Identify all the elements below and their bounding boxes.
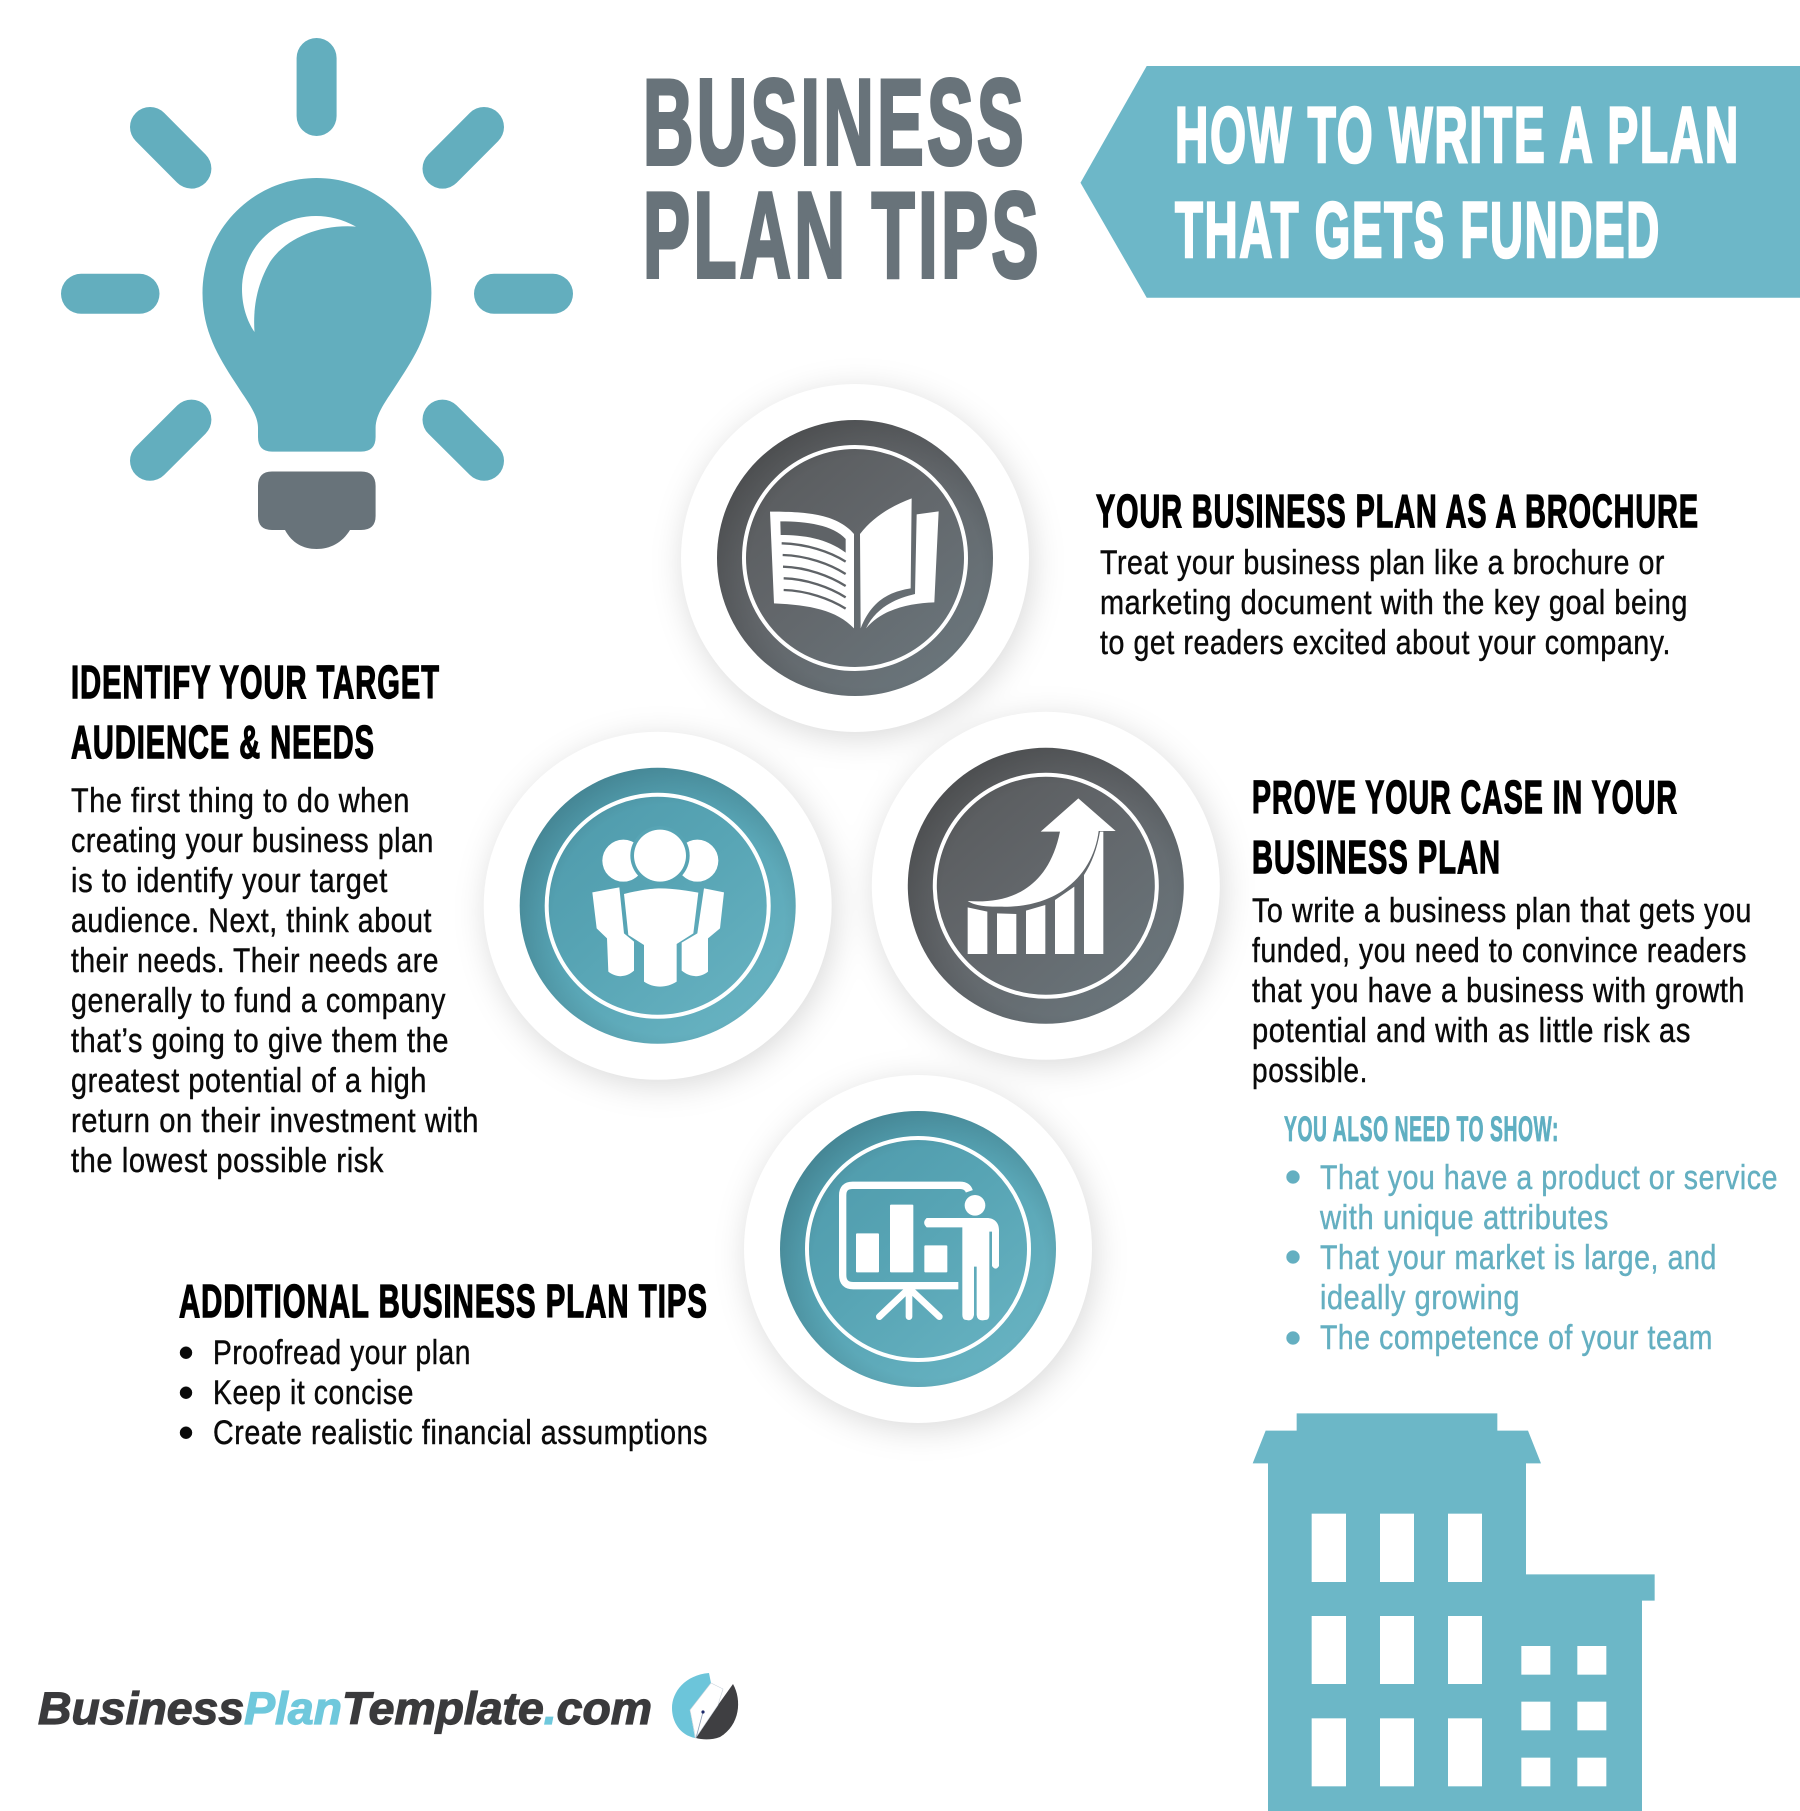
icon: presenter at board: [843, 1185, 999, 1320]
icon: light bulb: [81, 58, 553, 549]
banner: [1080, 66, 1800, 298]
body text: [71, 782, 479, 1180]
body text: marketing document with the key goal being: [1100, 584, 1688, 622]
bullet list: That your market is large, and: [1320, 1239, 1717, 1277]
bullet list: with unique attributes: [1319, 1199, 1609, 1237]
body text: the lowest possible risk: [71, 1142, 384, 1180]
circle: people: [484, 732, 832, 1080]
icon: rising bars and arrow: [968, 798, 1116, 954]
body text: The first thing to do when: [71, 782, 410, 820]
body text: creating your business plan: [71, 822, 434, 860]
body text: [1100, 544, 1688, 662]
body text: their needs. Their needs are: [71, 942, 439, 980]
title: BUSINESS: [643, 54, 1027, 190]
panel: prove your case: [1252, 771, 1778, 1357]
panel: brochure: [1096, 485, 1699, 662]
logo: [38, 1673, 738, 1739]
panel: additional tips: [179, 1275, 708, 1452]
bulb glass: [202, 178, 431, 452]
body text: Treat your business plan like a brochure or: [1100, 544, 1665, 582]
body text: potential and with as little risk as: [1252, 1012, 1691, 1050]
bullet list: Create realistic financial assumptions: [213, 1414, 708, 1452]
title: PLAN TIPS: [643, 167, 1042, 303]
heading: AUDIENCE & NEEDS: [71, 716, 375, 768]
building: [1253, 1413, 1655, 1811]
icon: open book: [770, 498, 939, 628]
bulb base: [258, 472, 376, 549]
subheading: YOU ALSO NEED TO SHOW:: [1284, 1110, 1559, 1149]
circle: presentation: [744, 1075, 1092, 1423]
heading: [1252, 771, 1678, 883]
heading: [71, 656, 440, 768]
body text: greatest potential of a high: [71, 1062, 427, 1100]
panel: target audience: [71, 656, 479, 1180]
bullet list: Keep it concise: [213, 1374, 414, 1412]
building windows: [1312, 1514, 1606, 1786]
circle: growth chart: [872, 712, 1220, 1060]
body text: that’s going to give them the: [71, 1022, 449, 1060]
bullet list: [180, 1334, 708, 1452]
heading: IDENTIFY YOUR TARGET: [71, 656, 440, 708]
banner heading: [1175, 90, 1740, 274]
bullet list: [1286, 1159, 1778, 1357]
body text: return on their investment with: [71, 1102, 479, 1140]
bullet list: Proofread your plan: [213, 1334, 471, 1372]
body text: possible.: [1252, 1052, 1368, 1090]
logo wordmark: BusinessPlanTemplate.com: [38, 1683, 652, 1734]
logo icon: pen nib: [672, 1673, 738, 1739]
body text: is to identify your target: [71, 862, 388, 900]
icon: light rays: [81, 58, 553, 461]
bulb highlight: [242, 216, 356, 332]
body text: to get readers excited about your company.: [1100, 624, 1671, 662]
title: [643, 54, 1042, 303]
heading: BUSINESS PLAN: [1252, 831, 1501, 883]
bullet list: The competence of your team: [1320, 1319, 1713, 1357]
circle shadows: [487, 390, 1223, 1429]
body text: audience. Next, think about: [71, 902, 432, 940]
bullet list: ideally growing: [1320, 1279, 1520, 1317]
body text: [1252, 892, 1752, 1090]
circle: book: [681, 384, 1029, 732]
icon: team: [592, 826, 724, 987]
heading: ADDITIONAL BUSINESS PLAN TIPS: [179, 1275, 708, 1327]
body text: generally to fund a company: [71, 982, 446, 1020]
